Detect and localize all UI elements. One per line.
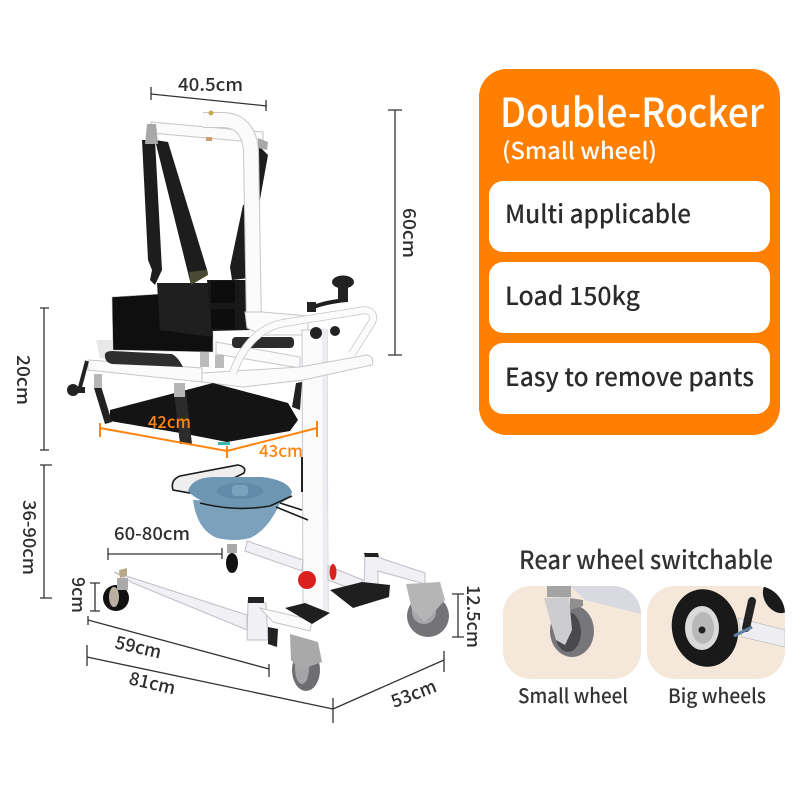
dimension: total length 81cm: 81cm xyxy=(127,665,178,700)
dimension: 9cm leg clearance: 9cm xyxy=(66,577,92,613)
footplates xyxy=(285,582,390,624)
card: multi applicable xyxy=(489,181,770,252)
back pad and waist belt xyxy=(112,270,250,352)
dimension: total width 53cm xyxy=(333,651,444,714)
label: small wheel: Small wheel xyxy=(518,680,628,709)
card: load: Load 150kg xyxy=(505,277,641,313)
base wheels xyxy=(103,544,449,691)
base legs xyxy=(114,541,425,647)
dimension: seat depth 43cm: 43cm xyxy=(259,437,303,462)
dimension: frame height 60cm xyxy=(388,110,423,355)
heading: rear wheel switchable: Rear wheel switchable xyxy=(519,541,773,577)
product photo: patient transfer chair xyxy=(67,110,449,691)
panel: big wheel thumbnail xyxy=(647,586,785,679)
dimension: seat height 36-90cm: 36-90cm xyxy=(17,500,43,575)
subheading: (Small wheel) xyxy=(502,132,657,166)
heading: Double-Rocker xyxy=(500,81,765,139)
dimension: inner length 59cm: 59cm xyxy=(113,629,164,664)
panel: product features xyxy=(479,69,780,435)
right crank handle xyxy=(307,276,354,339)
panel: small wheel thumbnail xyxy=(503,586,641,679)
dimension: leg spread 60-80cm xyxy=(108,520,222,560)
dimension: seat width 42cm: 42cm xyxy=(148,408,191,433)
card: load xyxy=(489,262,770,333)
card: easy to remove pants xyxy=(489,343,770,414)
left arm pad xyxy=(105,351,183,367)
dimension: leg spread 60-80cm: 60-80cm xyxy=(114,520,190,546)
dimension: seat width 42cm xyxy=(100,408,317,458)
icon: small caster wheel xyxy=(544,586,641,657)
front handle loop xyxy=(233,310,373,373)
upright frame with top bar xyxy=(145,110,308,335)
commode bucket xyxy=(172,457,308,540)
dimension: seat height 36-90cm xyxy=(17,465,52,598)
seat frame xyxy=(88,340,373,387)
card: multi applicable: Multi applicable xyxy=(505,195,691,231)
panel background xyxy=(479,69,780,435)
red adjustment knobs xyxy=(298,564,336,589)
dimension: inner length 59cm xyxy=(88,616,269,677)
dimension: total width 53cm: 53cm xyxy=(387,672,440,714)
dimension: top width 40.5cm: 40.5cm xyxy=(178,71,243,97)
dimension: top width 40.5cm xyxy=(151,71,267,111)
left crank handle xyxy=(67,361,87,396)
rear frame and right arm pad xyxy=(216,337,300,368)
dimension: total length 81cm xyxy=(87,645,333,723)
dimension: armrest height 20cm: 20cm xyxy=(11,355,37,405)
seat sling xyxy=(94,374,302,445)
dimension: 12.5cm wheel height: 12.5cm xyxy=(461,585,487,648)
dimension: armrest height 20cm xyxy=(11,308,49,450)
upper harness straps xyxy=(142,140,268,285)
lower column xyxy=(302,330,328,613)
dimension: frame height 60cm: 60cm xyxy=(397,208,423,258)
card: easy to remove pants: Easy to remove pants xyxy=(505,358,754,394)
icon: big pneumatic wheel xyxy=(672,586,785,667)
label: big wheels: Big wheels xyxy=(668,680,766,709)
